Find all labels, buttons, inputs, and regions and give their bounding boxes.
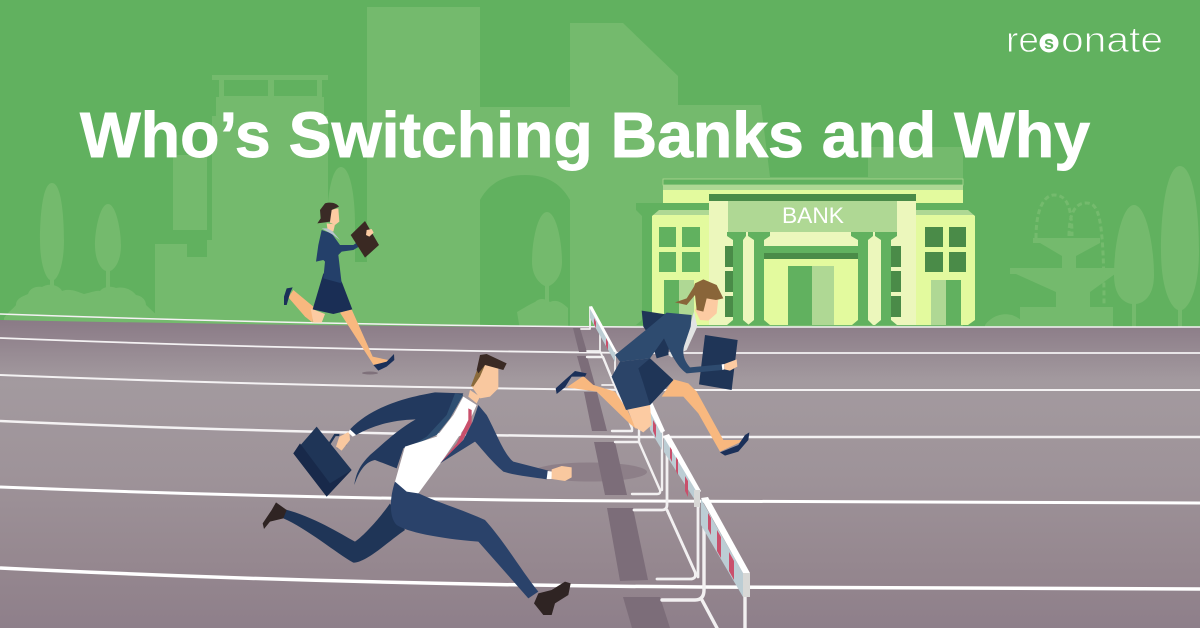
blouse [668, 312, 697, 357]
shadow under far runner [362, 372, 378, 374]
right corner column [968, 203, 983, 325]
front hand [552, 466, 572, 481]
third bar stripes [670, 447, 688, 497]
sign board [728, 201, 897, 232]
tree 5 [1161, 166, 1199, 330]
knee [627, 405, 652, 432]
right wing shade [916, 210, 975, 215]
far bar stripes [594, 318, 608, 350]
tree 2 [95, 204, 121, 292]
back leg [288, 290, 313, 323]
side windows [725, 246, 901, 317]
trailing leg [567, 376, 637, 429]
jacket [615, 313, 722, 373]
leading leg [662, 379, 742, 452]
trailing shoe [556, 371, 587, 394]
portico dark lintel [764, 253, 858, 259]
tree 4 [1114, 205, 1154, 330]
back knee [311, 308, 325, 323]
arch opening [480, 172, 570, 330]
cuff [722, 364, 724, 370]
second bar top [646, 402, 665, 433]
left wing shade [652, 210, 709, 215]
briefcase handle [329, 435, 346, 447]
dark arch in skyline [327, 167, 570, 330]
hand [366, 229, 374, 237]
businessman runner [263, 354, 572, 615]
portico wall [764, 259, 858, 325]
upper roof [663, 179, 963, 185]
neck [327, 223, 335, 232]
fountain upper bowl [1033, 238, 1100, 268]
second hurdle frame [587, 357, 662, 494]
near bar end cap [743, 573, 750, 597]
rooftop pavilion [212, 75, 328, 118]
small bush [985, 314, 1026, 328]
third bar end cap [694, 490, 700, 507]
back shoe [263, 502, 287, 529]
logo letters onate: onate [1061, 19, 1163, 60]
right wing wall [916, 215, 975, 325]
near bar top [701, 497, 750, 573]
jacket [316, 230, 369, 283]
third hurdle frame [634, 437, 698, 579]
left corner column [636, 203, 660, 325]
second bar face [648, 405, 662, 450]
back shoe [284, 287, 293, 305]
starting strip [573, 328, 670, 628]
lapel [410, 393, 463, 447]
logo s: s [1044, 33, 1054, 53]
city skyline silhouette [4, 7, 963, 330]
coat and back arm [350, 392, 463, 485]
front shoe [373, 354, 394, 371]
front leg [391, 482, 538, 598]
hurdling woman [556, 279, 749, 456]
tree 1 [40, 183, 64, 292]
collar [322, 228, 340, 240]
logo circle [1040, 34, 1058, 52]
left annex [173, 155, 207, 230]
logo letters re: re [1006, 19, 1039, 60]
front shoe [534, 582, 571, 615]
left building [155, 116, 367, 330]
main door left [788, 266, 812, 325]
side tree behind runner [327, 167, 355, 265]
left wing wall [652, 215, 709, 325]
far woman runner [284, 203, 394, 371]
shadow under man's hand [533, 462, 647, 482]
third bar top [663, 434, 701, 494]
briefcase shade [293, 443, 352, 497]
skirt [612, 358, 673, 410]
near bar face [701, 499, 743, 597]
track lane lines [0, 314, 1200, 589]
front leg [340, 309, 388, 366]
left wing windows [659, 227, 700, 325]
skirt [313, 273, 352, 314]
hurdles [581, 307, 745, 628]
roof shade [663, 185, 963, 190]
left wing cornice [636, 203, 709, 210]
third bar face [664, 436, 700, 508]
near hurdle frame [662, 513, 745, 628]
resonate logo [1006, 19, 1163, 60]
hand [724, 359, 737, 371]
hair [317, 203, 339, 223]
skirt shade [638, 358, 673, 405]
bushes [4, 285, 160, 330]
face [695, 298, 718, 321]
side hair [471, 365, 485, 387]
back hand [336, 432, 350, 451]
left wing door shade [679, 280, 694, 325]
tie [440, 408, 472, 463]
running track surface [0, 320, 1200, 628]
fountain basin [1010, 268, 1115, 330]
tower building [367, 7, 963, 330]
centre block [709, 201, 916, 325]
right wing door [931, 280, 961, 325]
far hurdle frame [581, 307, 615, 385]
face [472, 365, 498, 398]
title: Who’s Switching Banks and Why [80, 99, 1090, 171]
fountain silhouette [1010, 195, 1115, 330]
columns [727, 232, 897, 325]
arch light ring [480, 168, 570, 200]
far bar top [589, 306, 617, 352]
portico lintel [764, 246, 858, 253]
hair [477, 354, 507, 373]
fountain water arcs [1036, 195, 1104, 306]
neck [468, 390, 480, 403]
back leg [283, 503, 405, 563]
face [330, 208, 339, 225]
main door right [812, 266, 834, 325]
front arm [440, 405, 548, 479]
tree in arch [532, 212, 562, 306]
right wing cornice [916, 203, 983, 210]
bush in arch [517, 299, 568, 330]
near bar stripes [708, 513, 734, 580]
hair [675, 279, 723, 312]
folder [699, 335, 738, 390]
back cuff [348, 429, 356, 437]
dark entablature [709, 194, 916, 201]
right trees [985, 166, 1199, 330]
sign text: BANK [782, 203, 844, 228]
far bar face [590, 307, 615, 362]
right wing windows [925, 227, 966, 272]
second bar stripe [653, 420, 656, 438]
leading shoe [720, 432, 749, 456]
folder [351, 221, 379, 258]
briefcase [293, 427, 352, 497]
cuff front [547, 471, 552, 479]
upper wall [663, 190, 963, 204]
hurdle bars [589, 306, 750, 597]
back arm [642, 311, 670, 358]
shirt [395, 397, 477, 493]
bank building [636, 179, 983, 325]
